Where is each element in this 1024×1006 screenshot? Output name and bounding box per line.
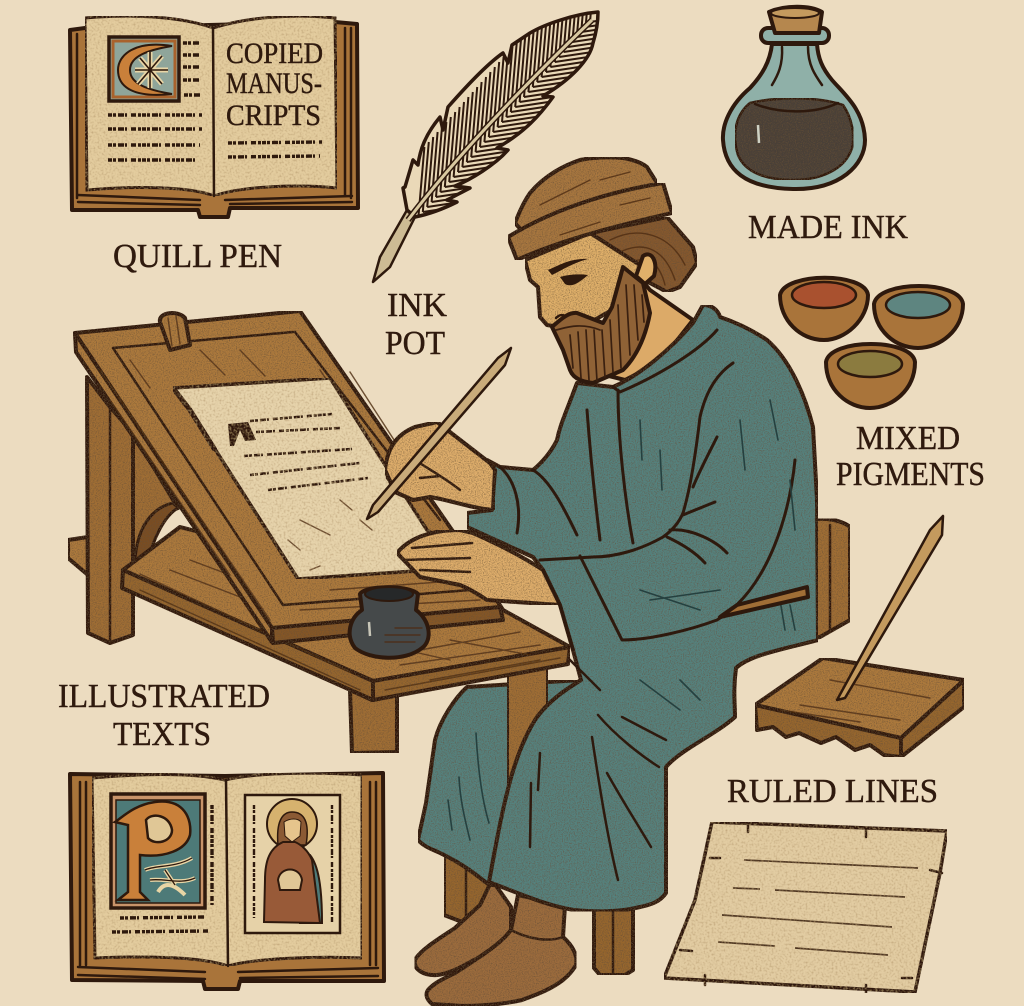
icon: pigment bowls — [780, 278, 963, 408]
parchment letter — [228, 422, 256, 446]
slanted board — [75, 311, 503, 642]
label: mixed pigments — [836, 420, 985, 493]
icon: feather quill — [372, 10, 600, 284]
illuminated initial C — [109, 37, 179, 101]
hat — [515, 157, 657, 240]
table top — [123, 527, 570, 681]
icon: ink bottle with cork — [723, 7, 865, 189]
board clip — [160, 313, 190, 350]
scribe robe — [467, 305, 818, 911]
icon: open manuscript book — [70, 16, 358, 217]
ruling board — [755, 658, 964, 757]
beard — [552, 267, 650, 383]
icon: boots — [415, 880, 576, 1006]
parchment script — [244, 414, 368, 490]
label: mixed pigments: MIXED — [856, 420, 960, 457]
back leg fold lines — [448, 733, 489, 840]
ear — [636, 254, 655, 284]
label: ink pot: POT — [385, 325, 445, 362]
icon: ruled parchment — [664, 822, 947, 993]
label: ink pot — [385, 287, 447, 362]
robe fold lines — [500, 330, 795, 880]
nose line — [556, 315, 568, 324]
desk left post — [87, 377, 133, 643]
scribe quill in hand — [367, 348, 511, 519]
book title text: COPIED — [226, 37, 323, 70]
robe cuff over hand — [543, 570, 573, 650]
eyebrow and eye — [548, 259, 588, 285]
desk left front leg — [350, 690, 397, 753]
saint miniature — [245, 795, 340, 933]
icon: illustrated open book — [70, 773, 384, 989]
face — [525, 233, 645, 330]
label: illustrated texts: TEXTS — [113, 716, 211, 753]
label: ruled lines: RULED LINES — [727, 773, 938, 810]
label: mixed pigments: PIGMENTS — [836, 456, 985, 493]
book title text: CRIPTS — [226, 99, 321, 132]
desk right leg — [507, 655, 548, 793]
illuminated initial P — [111, 794, 205, 908]
label: ink pot: INK — [387, 287, 447, 324]
parchment sheet — [173, 378, 450, 579]
label: made ink: MADE INK — [748, 209, 908, 246]
hair — [590, 217, 697, 292]
ink pot on desk — [350, 587, 429, 658]
stool seat band — [720, 587, 808, 617]
wooden writing desk — [68, 311, 570, 753]
scribe resting hand — [397, 530, 560, 605]
ruling stylus — [837, 516, 943, 700]
bowl: blue pigment — [874, 286, 963, 348]
icon: ruling board with stylus — [755, 516, 964, 757]
bowl: ochre pigment — [826, 344, 915, 408]
label: quill pen: QUILL PEN — [113, 238, 282, 275]
scribe head — [508, 157, 697, 383]
desk support panel — [120, 420, 178, 565]
icon: stool — [444, 519, 850, 975]
scribe back leg robe — [418, 680, 581, 887]
desk support arch — [135, 503, 178, 563]
book title text — [226, 37, 323, 132]
book title text: MANUS- — [226, 67, 322, 100]
label: illustrated texts — [58, 678, 270, 753]
manuscript script lines — [108, 43, 322, 160]
scribe neck — [605, 278, 693, 380]
desk side rail — [68, 537, 88, 575]
label: illustrated texts: ILLUSTRATED — [58, 678, 270, 715]
bowl: red pigment — [780, 278, 868, 340]
illuminated script — [112, 805, 212, 932]
scribe writing hand — [385, 422, 495, 510]
